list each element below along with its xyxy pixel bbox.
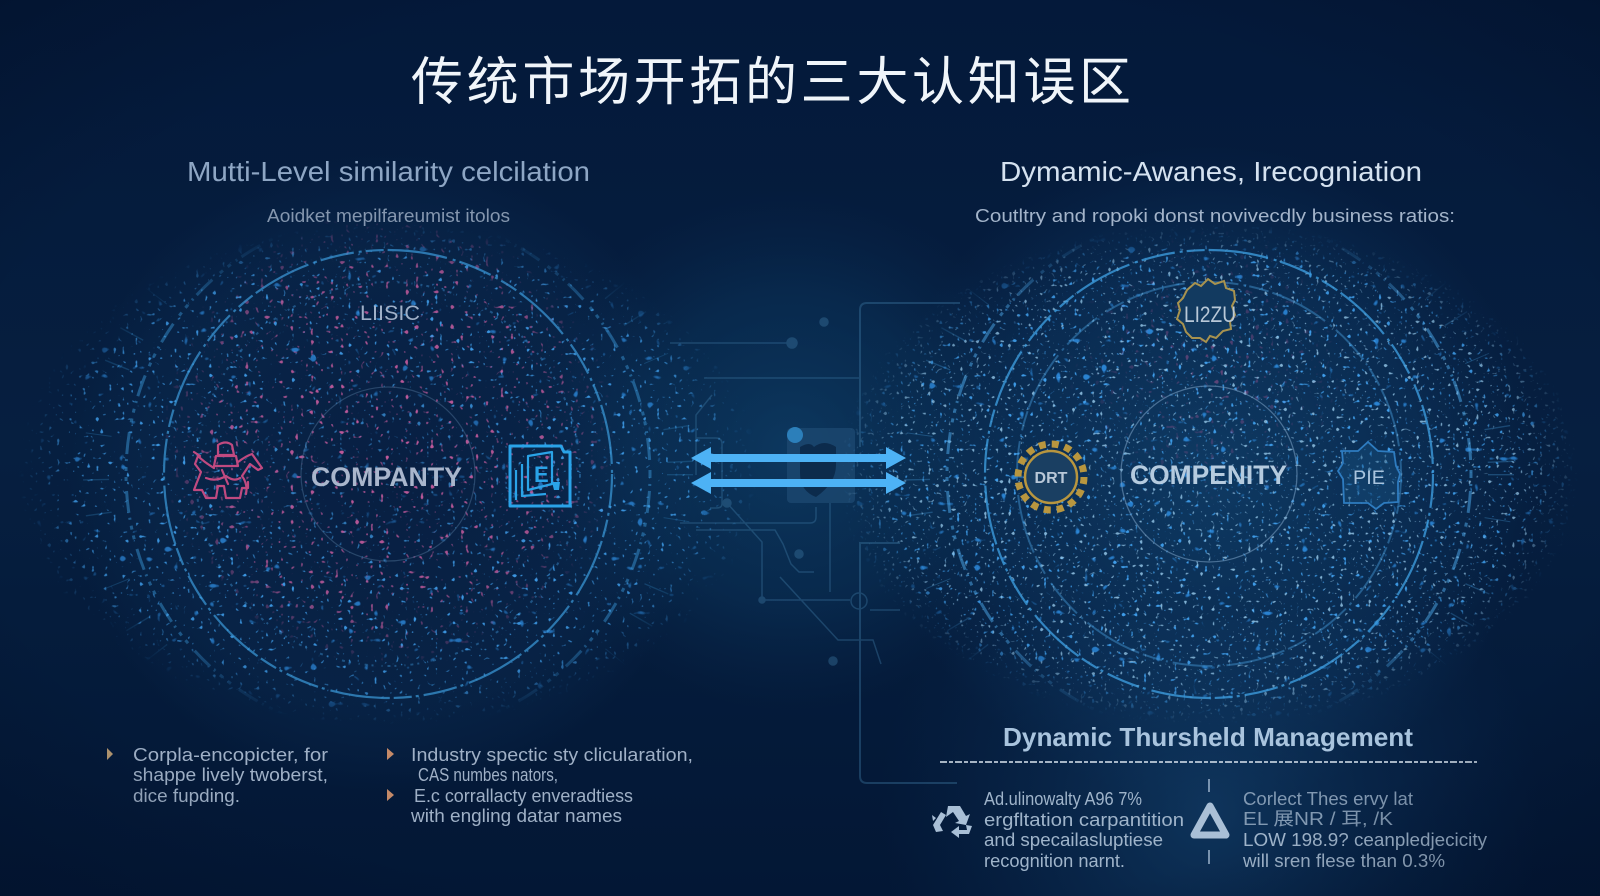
left bullet list, column 2: with engling datar names (410, 805, 622, 826)
left bullet list, column 2: E.c corrallacty enveradtiess (414, 785, 633, 806)
icon: pink figure (194, 442, 262, 498)
right centre label: COMPENITY (1130, 460, 1287, 490)
right radial rings (904, 240, 1514, 708)
right circle badge: L12ZU (1177, 279, 1236, 342)
threshold management heading: Dynamic Thursheld Management (1003, 722, 1413, 752)
left circle label: LIISIC: LIISIC (360, 302, 420, 325)
text block: threshold limits (1242, 789, 1487, 871)
text block: threshold limits: EL 展NR / 耳, /K (1243, 809, 1393, 829)
icon: recycle (932, 806, 972, 838)
text block: threshold limits: Corlect Thes ervy lat (1243, 789, 1413, 809)
text block: recognition (984, 789, 1184, 871)
left subheading: Aoidket mepilfareumist itolos (267, 206, 510, 226)
left bullet list, column 2 (387, 744, 693, 826)
right heading: Dymamic-Awanes, Irecogniation (1000, 156, 1422, 187)
pink dots: right (1076, 248, 1338, 500)
right circle badge: L12ZU: LI2ZU (1184, 302, 1236, 327)
pink dots: left (166, 216, 612, 661)
text block: recognition: Ad.ulinowalty A96 7% (984, 789, 1142, 809)
right circle badge: PIE puzzle (1338, 442, 1400, 509)
right circle badge: DRT gear: DRT (1035, 470, 1068, 487)
left bullet list, column 1: dice fupding. (133, 785, 240, 806)
vertical separator ticks (1208, 779, 1210, 864)
left bullet list, column 2: CAS numbes nators, (418, 764, 558, 785)
text block: threshold limits: will sren flese than 0.3% (1242, 851, 1445, 871)
left heading: Mutti-Level similarity celcilation (187, 156, 590, 187)
title: 传统市场开拓的三大认知误区 (411, 40, 1131, 115)
icon: blue document E (510, 446, 570, 506)
right circle badge: DRT gear (1018, 444, 1084, 510)
text block: threshold limits: LOW 198.9? ceanpledjecicity (1243, 830, 1487, 850)
bidirectional arrows (691, 447, 906, 494)
right subheading: Coutltry and ropoki donst novivecdly business ratios: (975, 206, 1455, 226)
text block: recognition: ergfltation carpantition (984, 810, 1184, 830)
dotted network: left (24, 228, 752, 721)
left bullet list, column 1: Corpla-encopicter, for (133, 744, 328, 765)
centre document icon (787, 427, 855, 503)
dotted network: right (846, 226, 1572, 722)
text block: recognition: and specailasluptiese (984, 830, 1163, 850)
icon: triangle (1194, 806, 1226, 835)
left bullet list, column 1 (107, 744, 328, 806)
text block: recognition: recognition narnt. (984, 851, 1125, 871)
circuit lines behind the arrows (670, 303, 960, 783)
left bullet list, column 2: Industry spectic sty clicularation, (411, 744, 693, 765)
dashed divider (940, 761, 1477, 763)
left radial rings (83, 240, 693, 708)
right circle badge: PIE puzzle: PIE (1353, 468, 1385, 489)
icon: blue document E: E (534, 462, 549, 487)
left centre label: COMPANTY (311, 462, 462, 492)
left bullet list, column 1: shappe lively twoberst, (133, 764, 328, 785)
